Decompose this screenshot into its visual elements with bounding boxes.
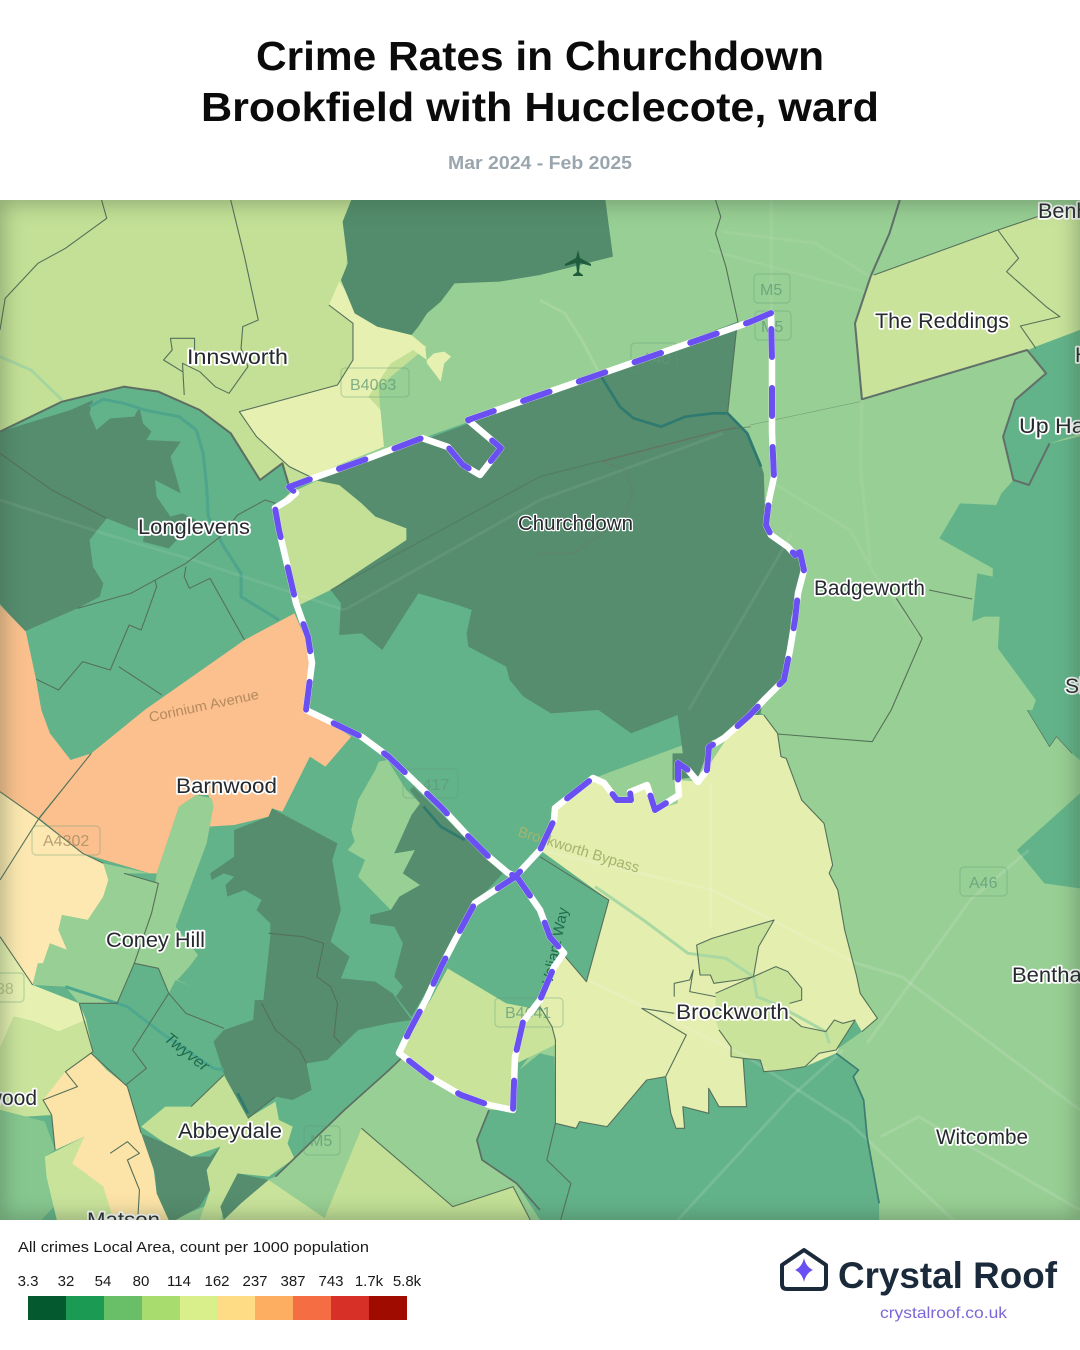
legend scale values: [18, 1273, 422, 1290]
boundary lines, north-east: [540, 200, 1060, 710]
area: Innsworth light green: [0, 200, 427, 487]
legend title: All crimes Local Area, count per 1000 population: [18, 1239, 369, 1256]
icon: Crystal Roof house logo: [782, 1250, 826, 1289]
legend scale values: 237: [242, 1273, 268, 1290]
area: southern pale orange: [43, 1053, 169, 1220]
area: central dark green: [210, 808, 411, 1118]
area: south of M5: [269, 1057, 540, 1220]
area: Longlevens dark green: [0, 400, 196, 632]
ward boundary: white line with purple dashes: [275, 313, 804, 1110]
area: Up Hatherley green: [1003, 330, 1080, 485]
place name labels: Abbeydale: [178, 1120, 282, 1143]
place name labels: Brockworth: [676, 1001, 789, 1024]
area: Brockworth light green estates: [697, 920, 774, 983]
area: Barnwood orange: [40, 613, 351, 873]
area: south green woodland: [477, 1053, 572, 1220]
area: Matson light: [45, 1137, 115, 1220]
road signs and road names: M5: [761, 319, 783, 336]
road signs and road names: [0, 274, 1007, 1155]
place name labels: Coney Hill: [106, 929, 205, 952]
road traces, north-east: [722, 232, 919, 633]
legend colour ramp: [28, 1296, 407, 1320]
footer: legend and brand: [18, 1239, 1058, 1322]
area: pale band: [0, 937, 86, 1048]
area: Coney Hill light green: [33, 863, 158, 1003]
area: airport dark green: [341, 200, 613, 335]
legend scale values: 743: [318, 1273, 344, 1290]
road signs and road names: A417: [412, 777, 449, 794]
area: Brockworth pale: [540, 715, 877, 1128]
map edge vignette: [0, 200, 1080, 1220]
road signs and road names: A40: [642, 351, 671, 368]
road traces: [0, 200, 999, 710]
legend scale values: 54: [95, 1273, 111, 1290]
legend scale values: 80: [133, 1273, 149, 1290]
road signs and road names: A4302: [43, 833, 89, 850]
area: eastern green: [939, 437, 1080, 710]
area: Churchdown dark green: [317, 322, 805, 780]
area: eastern strip light green: [348, 760, 420, 910]
title: [201, 33, 879, 130]
road signs and road names: M5: [760, 282, 782, 299]
area: western pale orange: [0, 792, 108, 985]
title: Crime Rates in Churchdown: [256, 33, 824, 79]
legend scale values: 1.7k: [355, 1273, 384, 1290]
road signs and road names: Valiant Way: [539, 906, 572, 986]
legend scale values: 387: [280, 1273, 306, 1290]
area: western green band and ward base: [0, 313, 804, 1220]
legend scale values: 32: [58, 1273, 74, 1290]
area: eastern green south: [1027, 710, 1080, 760]
area: The Reddings: [855, 207, 1080, 399]
boundary lines, south-east: [540, 710, 1072, 1220]
area: south light green field: [324, 1128, 530, 1220]
area: light green field inside ward: [275, 481, 406, 607]
river Twyver: [65, 987, 224, 1070]
place name labels: Witcombe: [936, 1126, 1028, 1149]
place name labels: Longlevens: [138, 516, 250, 539]
date range subtitle: Mar 2024 - Feb 2025: [448, 153, 632, 173]
area: Innsworth pale: [239, 282, 451, 477]
road signs and road names: B4641: [505, 1005, 551, 1022]
area: southern green: [547, 1053, 879, 1220]
road signs and road names: A46: [969, 875, 998, 892]
place name labels: Badgeworth: [814, 577, 925, 600]
place name labels: Barnwood: [176, 775, 277, 798]
area: Abbeydale light green: [141, 1075, 294, 1220]
place name labels: Churchdown: [518, 513, 633, 535]
brand url: crystalroof.co.uk: [880, 1305, 1008, 1322]
icon: airfield plane: [565, 250, 591, 276]
panel: choropleth map: [0, 200, 1080, 1220]
area: south-western green: [0, 1110, 57, 1220]
header: title and date range: [201, 33, 879, 173]
area: strip east of Churchdown inside ward: [728, 313, 804, 700]
place name labels: Innsworth: [187, 346, 288, 369]
place name labels: The Reddings: [875, 310, 1009, 333]
legend scale values: 5.8k: [393, 1273, 422, 1290]
area: south-western light green: [0, 1017, 93, 1117]
stream, Brockworth: [595, 887, 829, 1043]
legend scale values: 114: [167, 1273, 191, 1290]
legend scale values: 162: [204, 1273, 230, 1290]
place name labels: [0, 200, 1080, 1232]
area: A417 dark green: [370, 787, 503, 1017]
area: Abbeydale dark green: [141, 1133, 220, 1220]
road signs and road names: M5: [310, 1133, 332, 1150]
river Horsbere: [90, 399, 279, 620]
boundary lines, south-west: [0, 753, 540, 1220]
title: Brookfield with Hucclecote, ward: [201, 84, 879, 130]
road signs and road names: Brockworth Bypass: [516, 824, 641, 877]
brand name: Crystal Roof: [838, 1255, 1058, 1296]
road traces, Brockworth: [540, 783, 1080, 1220]
road signs and road names: Corinium Avenue: [147, 686, 260, 725]
boundary lines, north-west: [0, 200, 751, 695]
road signs and road names: B4063: [350, 377, 396, 394]
area: left orange: [0, 605, 91, 818]
road signs and road names: Twyver: [161, 1030, 213, 1076]
legend scale values: 3.3: [18, 1273, 38, 1290]
area: Brockworth west estate light green: [399, 968, 568, 1110]
